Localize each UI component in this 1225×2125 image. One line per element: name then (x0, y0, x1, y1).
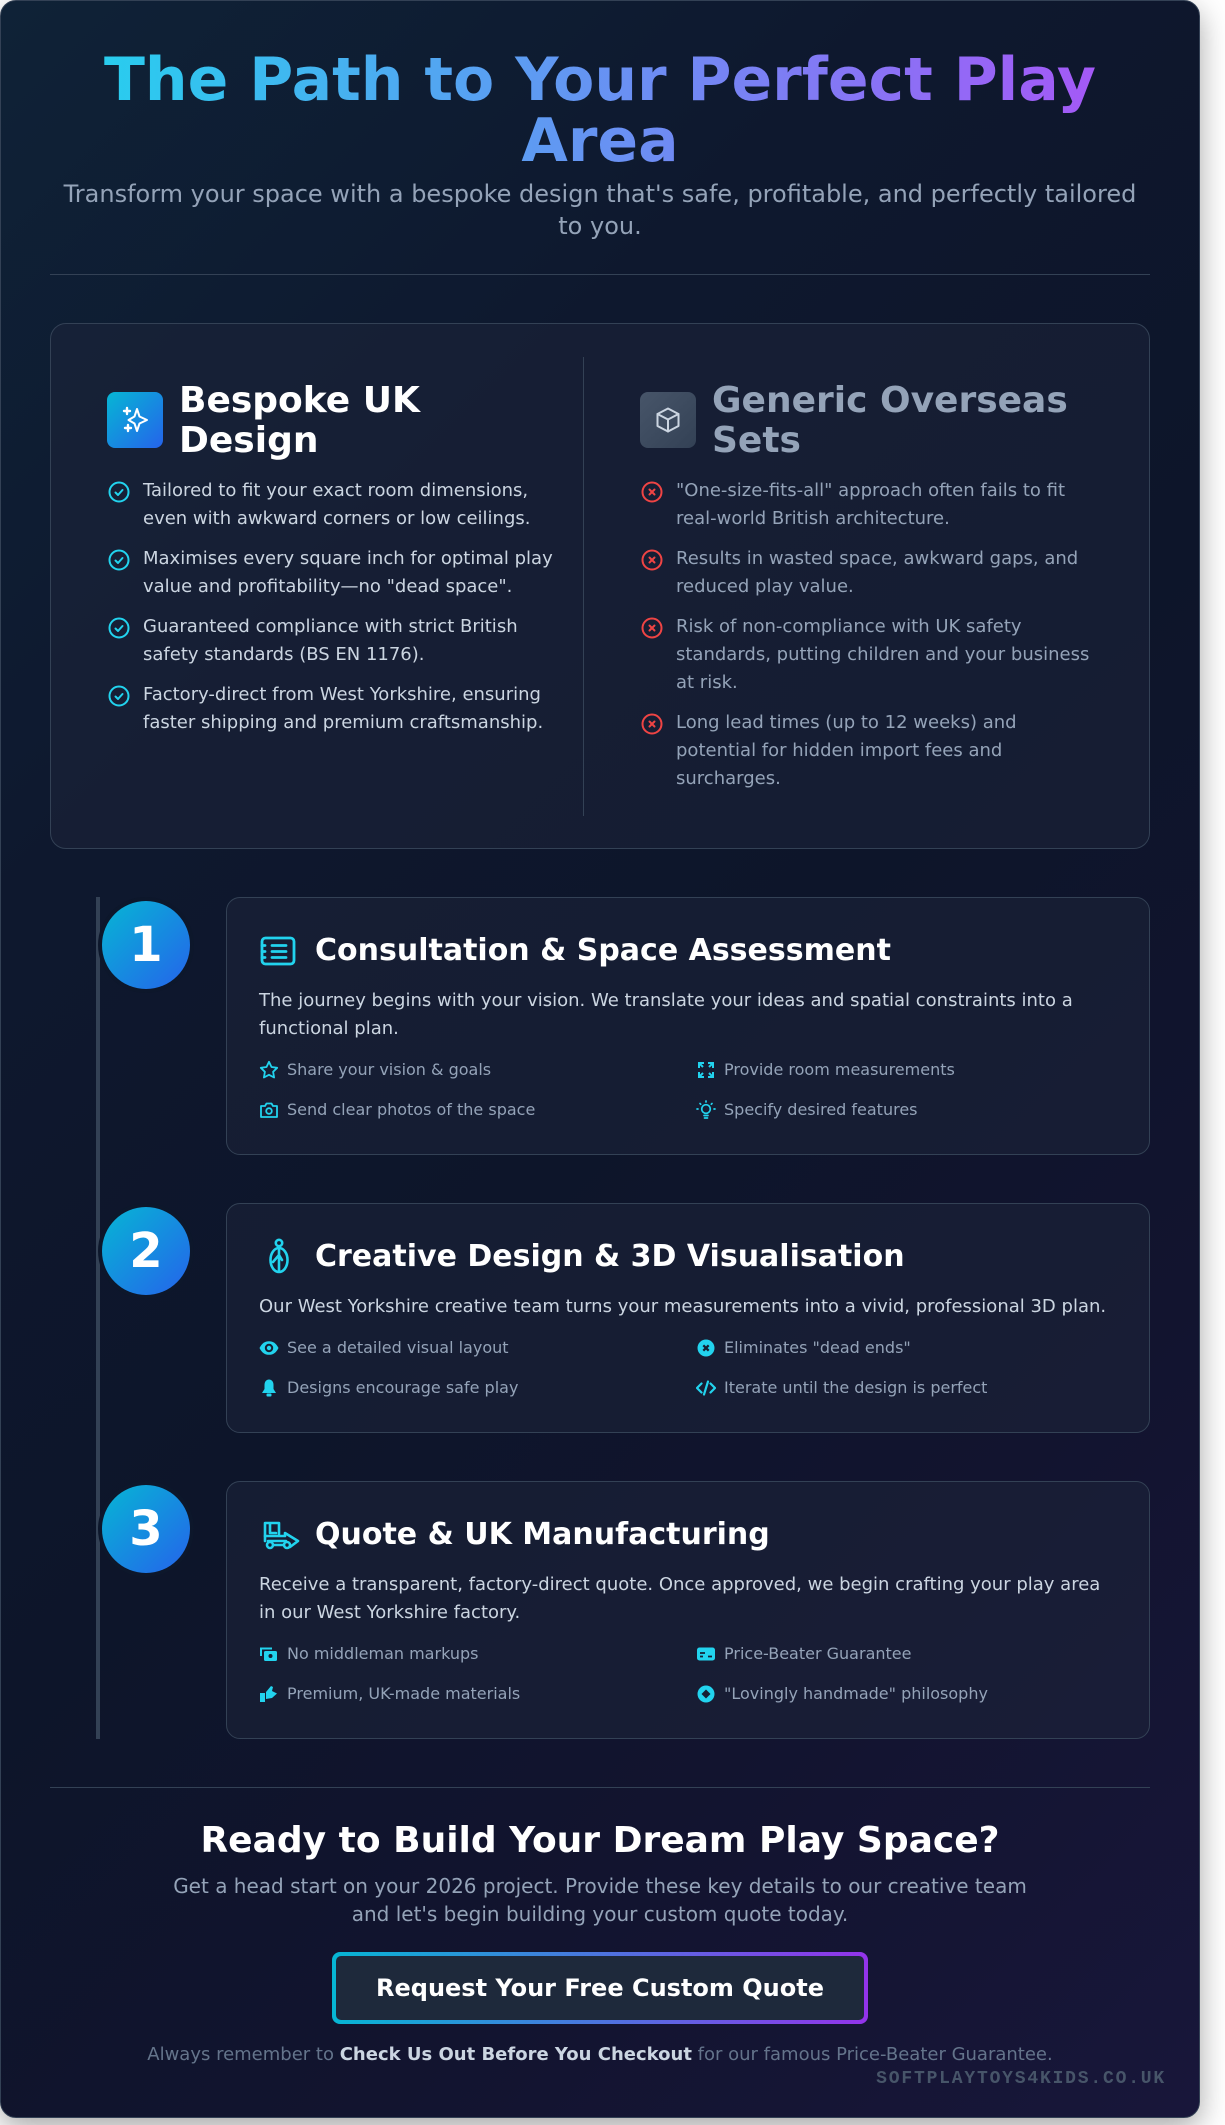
heading: bespoke: Design (179, 420, 318, 461)
drawback 4 (642, 712, 1017, 789)
drawback 3: Risk of non-compliance with UK safety (676, 616, 1022, 637)
heading: generic: Sets (712, 420, 801, 461)
subtitle (64, 180, 1136, 240)
benefit 4: faster shipping and premium craftsmanship. (143, 712, 543, 733)
description: Our West Yorkshire creative team turns your measurements into a vivid, professional 3D plan. (259, 1296, 1106, 1317)
step 1 number (102, 901, 190, 989)
panel: comparison (50, 323, 1150, 849)
benefit 3: Guaranteed compliance with strict British (143, 616, 518, 637)
drawback 2: reduced play value. (676, 576, 854, 597)
button (332, 1952, 868, 2024)
heading: generic (712, 380, 1068, 461)
drawback 1: real-world British architecture. (676, 508, 950, 529)
item: Iterate until the design is perfect (724, 1378, 987, 1397)
description (259, 1574, 1100, 1623)
step 3 number: 3 (129, 1501, 163, 1557)
icon: box (640, 392, 696, 448)
item: Designs encourage safe play (287, 1378, 518, 1397)
item: Provide room measurements (724, 1060, 955, 1079)
title (50, 50, 1150, 172)
drawback 3 (642, 616, 1089, 693)
call to action heading: Ready to Build Your Dream Play Space? (200, 1820, 1000, 1861)
heading: generic: Generic Overseas (712, 380, 1068, 421)
benefit 2 (108, 548, 553, 597)
subtitle: to you. (558, 212, 642, 240)
drawback 3: at risk. (676, 672, 738, 693)
benefit 2: value and profitability—no "dead space". (143, 576, 512, 597)
heading: Creative Design & 3D Visualisation (315, 1239, 905, 1274)
description: The journey begins with your vision. We translate your ideas and spatial constraints into a (259, 990, 1073, 1011)
step 3 number (102, 1485, 190, 1573)
benefit 1: even with awkward corners or low ceilings. (143, 508, 530, 529)
description (258, 990, 1073, 1039)
step 2 card (226, 1203, 1150, 1433)
description: in our West Yorkshire factory. (259, 1602, 520, 1623)
drawback 2: Results in wasted space, awkward gaps, and (676, 548, 1078, 569)
icon: list card (260, 936, 296, 966)
drawback 4: surcharges. (676, 768, 781, 789)
icon: figure in oval (269, 1238, 289, 1274)
heading: bespoke: Bespoke UK (179, 380, 420, 421)
drawback 1 (642, 480, 1065, 529)
step 2 number (102, 1207, 190, 1295)
item: No middleman markups (287, 1644, 478, 1663)
step 1 card (226, 897, 1150, 1155)
icon: truck (264, 1522, 300, 1550)
description: Receive a transparent, factory-direct quote. Once approved, we begin crafting your play area (259, 1574, 1100, 1595)
benefit 4: Factory-direct from West Yorkshire, ensuring (143, 684, 541, 705)
title: Area (521, 106, 679, 176)
call to action text (173, 1874, 1027, 1926)
item: "Lovingly handmade" philosophy (724, 1684, 988, 1703)
item: Eliminates "dead ends" (724, 1338, 911, 1357)
column: generic overseas sets (640, 380, 1089, 789)
item: See a detailed visual layout (287, 1338, 509, 1357)
call to action text: and let's begin building your custom quote today. (352, 1902, 848, 1926)
step 3 card (226, 1481, 1150, 1739)
drawback 2 (642, 548, 1078, 597)
item: Send clear photos of the space (287, 1100, 535, 1119)
item: Price-Beater Guarantee (724, 1644, 911, 1663)
benefit 4 (108, 684, 543, 733)
benefit 3: safety standards (BS EN 1176). (143, 644, 425, 665)
title: The Path to Your Perfect Play (104, 45, 1096, 115)
watermark: SOFTPLAYTOYS4KIDS.CO.UK (876, 2069, 1166, 2089)
call to action text: Get a head start on your 2026 project. Provide these key details to our creative team (173, 1874, 1027, 1898)
benefit 2: Maximises every square inch for optimal play (143, 548, 553, 569)
drawback 4: potential for hidden import fees and (676, 740, 1002, 761)
description: functional plan. (259, 1018, 399, 1039)
item: Premium, UK-made materials (287, 1684, 520, 1703)
benefit 3 (108, 616, 518, 665)
drawback 4: Long lead times (up to 12 weeks) and (676, 712, 1017, 733)
icon: sparkles (107, 392, 163, 448)
subtitle: Transform your space with a bespoke design that's safe, profitable, and perfectly tailored (64, 180, 1136, 208)
benefit 1 (108, 480, 530, 529)
benefit 1: Tailored to fit your exact room dimensions, (143, 480, 528, 501)
drawback 3: standards, putting children and your business (676, 644, 1089, 665)
step 2 number: 2 (129, 1223, 163, 1279)
drawback 1: "One-size-fits-all" approach often fails to fit (676, 480, 1065, 501)
step 1 number: 1 (129, 917, 163, 973)
column: bespoke UK design (107, 380, 553, 733)
heading: Consultation & Space Assessment (315, 933, 891, 968)
item: Specify desired features (724, 1100, 918, 1119)
heading: Quote & UK Manufacturing (315, 1517, 770, 1552)
footnote: Always remember to Check Us Out Before You Checkout for our famous Price-Beater Guarantee. (147, 2044, 1053, 2065)
item: Share your vision & goals (287, 1060, 491, 1079)
timeline line (96, 897, 100, 1739)
button: Request Your Free Custom Quote (376, 1974, 824, 2002)
heading: bespoke (179, 380, 421, 461)
